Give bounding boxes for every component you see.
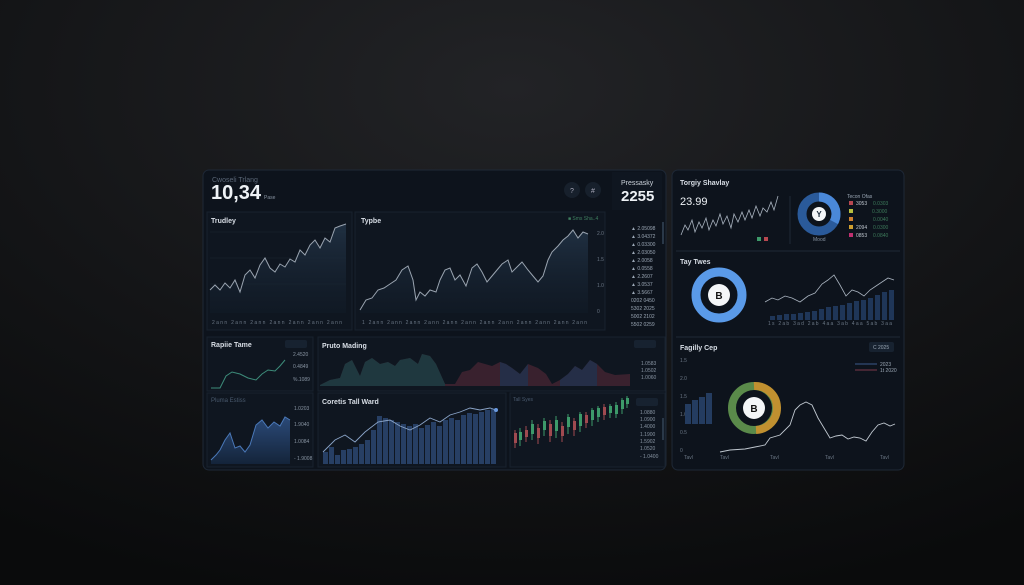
legend: 0.0303: [873, 201, 889, 207]
chart: Typbe: 1.0: [597, 283, 604, 289]
stat: Pressasky: 2255: [621, 188, 654, 205]
panel: main dashboard: [203, 170, 666, 470]
panel: Tall Syes candlestick chart: - 1.0400: [640, 454, 659, 460]
panel: Pluma Estiss: 1.9040: [294, 422, 310, 428]
list: ticker values: [631, 226, 656, 328]
sub-panel: Fagilly Cep: 0: [680, 448, 683, 454]
list: ticker values: ▲ 3.5667: [631, 290, 653, 296]
sub-panel: Fagilly Cep: Tavl: [770, 455, 779, 461]
legend: 0.0840: [873, 233, 889, 239]
sub-panel: Fagilly Cep: C 2025: [873, 345, 889, 351]
stat: Pressasky: Pressasky: [621, 180, 654, 187]
panel: Pruto Mading: 1.0583: [641, 361, 657, 367]
chart: Typbe: ■ Sms Sha..4: [568, 216, 598, 222]
sub-panel: Fagilly Cep: Tavl: [720, 455, 729, 461]
header: total value: Cwoseli Trlang: [212, 177, 258, 184]
panel: Rapiie Tame: 2.4520: [293, 352, 309, 358]
donut: Y: Mood: [813, 237, 826, 243]
panel: Tall Syes candlestick chart: 1.5902: [640, 439, 656, 445]
panel: Tall Syes candlestick chart: 1.0520: [640, 446, 656, 452]
list: ticker values: ▲ 2.2607: [631, 274, 653, 280]
sub-panel: Fagilly Cep: 1t 2020: [880, 368, 897, 374]
legend: 0.0040: [873, 217, 889, 223]
chart: Typbe: 1.5: [597, 257, 604, 263]
panel: Tall Syes candlestick chart: 1.0880: [640, 410, 656, 416]
donut: Y: [802, 197, 836, 243]
panel: Pruto Mading: 1.0060: [641, 375, 657, 381]
panel: Rapiie Tame: Rapiie Tame: [211, 342, 252, 349]
panel: Pluma Estiss: Pluma Estiss: [211, 398, 246, 404]
icon buttons: ?: [570, 188, 574, 195]
panel: right dashboard: [672, 170, 904, 470]
sub-panel: Fagilly Cep: 1.5: [680, 394, 687, 400]
sub-panel: Fagilly Cep: [680, 342, 897, 461]
sub-panel: Tay Twes: Tay Twes: [680, 259, 711, 266]
list: ticker values: ▲ 3.04372: [631, 234, 656, 240]
list: ticker values: 5302 2025: [631, 306, 655, 312]
panel: Tall Syes candlestick chart: [510, 393, 665, 467]
sub-panel: Fagilly Cep: B: [750, 404, 758, 415]
legend: 2094: [856, 225, 867, 231]
sub-panel: Torgiy Shavlay: [680, 180, 790, 244]
panel: Pluma Estiss: - 1.9008: [294, 456, 313, 462]
sub-panel: Fagilly Cep: 2023: [880, 362, 891, 368]
panel: Coretis Tall Ward bar chart: Coretis Tall Ward: [322, 399, 379, 406]
list: ticker values: ▲ 0.03300: [631, 242, 656, 248]
icon buttons: [564, 182, 601, 198]
chart: Trudley: Trudley: [211, 218, 236, 225]
sub-panel: Fagilly Cep: 1.5: [680, 358, 687, 364]
legend: 0.0300: [873, 225, 889, 231]
sub-panel: Torgiy Shavlay: 23.99: [680, 196, 708, 208]
header: total value: Pase: [264, 195, 276, 201]
sub-panel: Tay Twes: 1s 2ab 3ad 2ab 4aa 3ab 4aa 5ab 3aa: [768, 321, 892, 327]
chart: Trudley: 2ann 2ann 2ann 2ann 2ann 2ann 2ann: [212, 320, 342, 326]
panel: Pluma Estiss: 1.0084: [294, 439, 310, 445]
sub-panel: Fagilly Cep: Tavl: [880, 455, 889, 461]
sub-panel: Tay Twes: B: [715, 291, 723, 302]
sub-panel: Fagilly Cep: 2.0: [680, 376, 687, 382]
panel: Pluma Estiss: 1.0203: [294, 406, 310, 412]
chart: Typbe: 0: [597, 309, 600, 315]
panel: Tall Syes candlestick chart: 1.1900: [640, 432, 656, 438]
list: ticker values: ▲ 2.0058: [631, 258, 653, 264]
panel: Pluma Estiss: [207, 393, 313, 467]
list: ticker values: 5502 0259: [631, 322, 655, 328]
sub-panel: Fagilly Cep: Fagilly Cep: [680, 345, 717, 352]
list: ticker values: ▲ 0.0558: [631, 266, 653, 272]
donut: Y: Y: [816, 210, 822, 219]
legend: Tecon Ofas: [847, 194, 873, 200]
sub-panel: Torgiy Shavlay: Torgiy Shavlay: [680, 180, 729, 187]
sub-panel: Fagilly Cep: 0.5: [680, 430, 687, 436]
panel: Pruto Mading: 1.0502: [641, 368, 657, 374]
sub-panel: Fagilly Cep: Tavl: [684, 455, 693, 461]
panel: Coretis Tall Ward bar chart: [318, 393, 506, 467]
stat: Pressasky: [612, 172, 662, 210]
panel: Rapiie Tame: [207, 337, 313, 391]
sub-panel: Tay Twes: [680, 259, 894, 327]
panel: Tall Syes candlestick chart: 1.4000: [640, 424, 656, 430]
list: ticker values: 0202 0450: [631, 298, 655, 304]
chart: Trudley: [207, 212, 352, 330]
panel: Tall Syes candlestick chart: Tall Syes: [513, 397, 534, 403]
panel: Pruto Mading: [318, 337, 665, 391]
legend: [847, 194, 889, 239]
sub-panel: Fagilly Cep: Tavl: [825, 455, 834, 461]
legend: 0.3000: [872, 209, 888, 215]
panel: Rapiie Tame: 0.4849: [293, 364, 309, 370]
list: ticker values: 5002 2102: [631, 314, 655, 320]
panel: Rapiie Tame: %.1089: [293, 377, 310, 383]
panel: Tall Syes candlestick chart: 1.0900: [640, 417, 656, 423]
header: total value: 10,34: [211, 182, 262, 204]
legend: 3053: [856, 201, 867, 207]
icon buttons: #: [591, 188, 595, 195]
list: ticker values: ▲ 2.03050: [631, 250, 656, 256]
list: ticker values: ▲ 2.05098: [631, 226, 656, 232]
chart: Typbe: 2.0: [597, 231, 604, 237]
list: ticker values: ▲ 3.0537: [631, 282, 653, 288]
header: total value: [211, 177, 276, 204]
chart: Typbe: 1 2ann 2ann 2ann 2ann 2ann 2ann 2ann 2ann 2ann 2ann 2ann 2ann: [362, 320, 587, 326]
legend: 0853: [856, 233, 867, 239]
sub-panel: Fagilly Cep: 1.0: [680, 412, 687, 418]
panel: Pruto Mading: Pruto Mading: [322, 343, 367, 350]
chart: Typbe: [355, 212, 605, 330]
chart: Typbe: Typbe: [361, 218, 381, 225]
